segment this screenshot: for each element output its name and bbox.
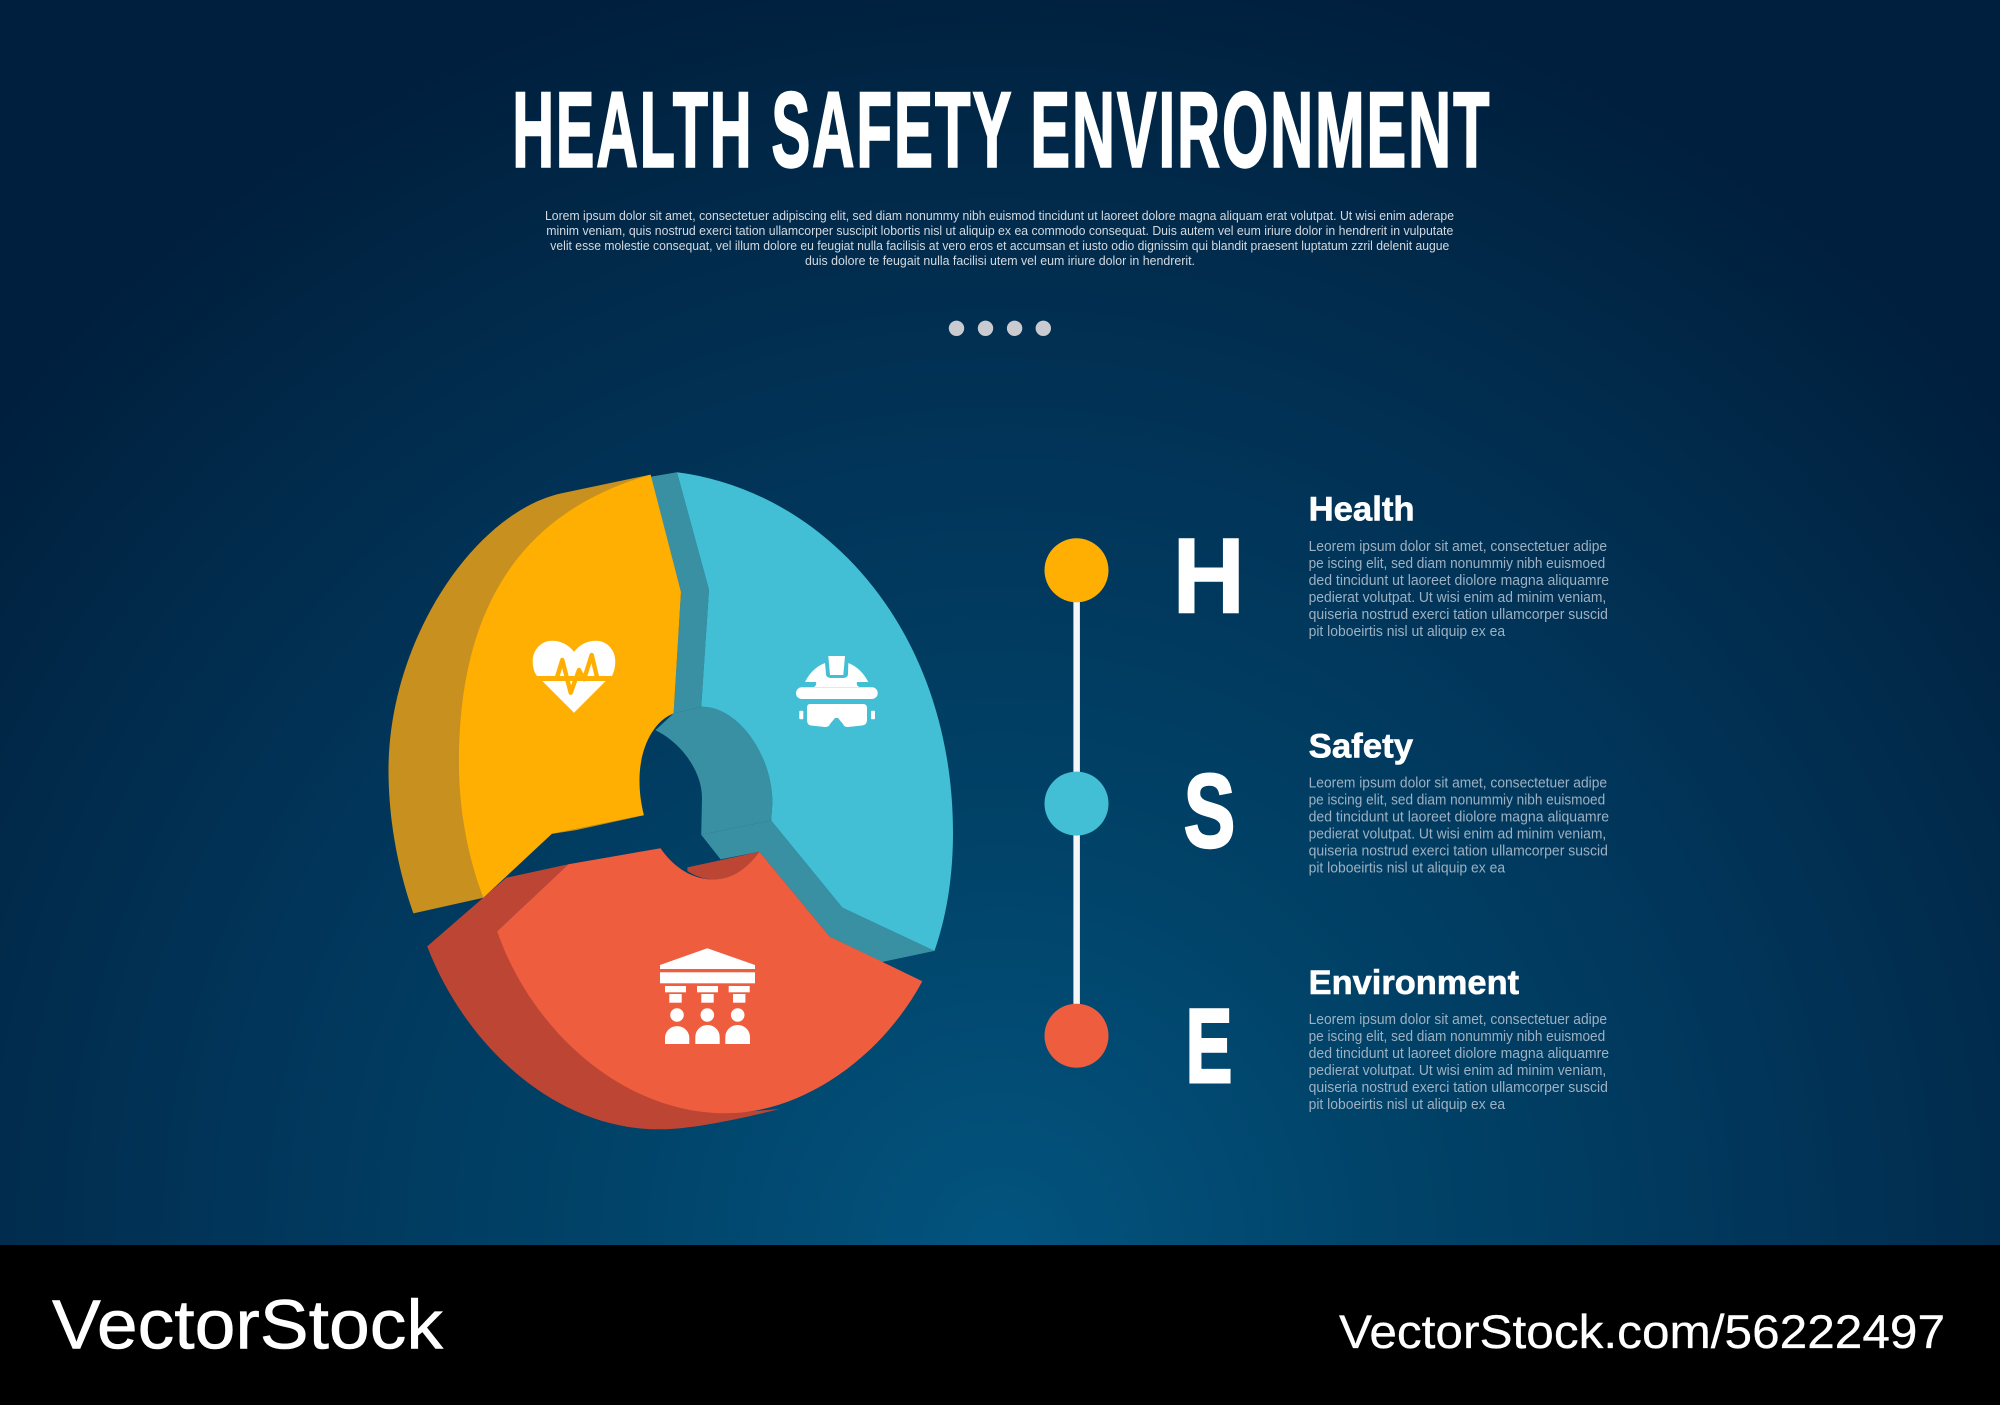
heading: health: Health bbox=[1309, 491, 1415, 529]
timeline marker: environment bbox=[1044, 1004, 1108, 1068]
segment: environment (red face) bbox=[497, 848, 922, 1113]
body: environment: pit loboeirtis nisl ut aliquip ex ea bbox=[1309, 1097, 1506, 1113]
body: environment: pe iscing elit, sed diam nonummiy nibh euismoed bbox=[1309, 1029, 1605, 1045]
body: health bbox=[1309, 539, 1609, 640]
segment: health (gold face) bbox=[459, 475, 681, 898]
body: health: pit loboeirtis nisl ut aliquip ex ea bbox=[1309, 624, 1506, 640]
heading: environment: Environment bbox=[1309, 964, 1519, 1002]
gold side wall bbox=[388, 475, 651, 913]
segment: safety (teal face) bbox=[677, 472, 953, 951]
body: health: pe iscing elit, sed diam nonummiy nibh euismoed bbox=[1309, 556, 1605, 572]
timeline marker: safety bbox=[1044, 772, 1108, 836]
body: safety: pe iscing elit, sed diam nonummiy nibh euismoed bbox=[1309, 793, 1605, 809]
timeline marker: health bbox=[1044, 538, 1108, 602]
intro text block: velit esse molestie consequat, vel illum dolore eu feugiat nulla facilisis at vero eros et accumsan et iusto odio dignissim qui blandit praesent luptatum zzril delenit augue bbox=[550, 238, 1449, 253]
pagination dots bbox=[949, 321, 1051, 336]
body: environment: Leorem ipsum dolor sit amet, consectetuer adipe bbox=[1309, 1012, 1607, 1028]
teal side walls bbox=[651, 472, 934, 962]
body: safety bbox=[1309, 776, 1609, 877]
icon: heart with pulse bbox=[533, 641, 615, 713]
footer logo: VectorStock bbox=[52, 1286, 444, 1364]
body: environment: ded tincidunt ut laoreet diolore magna aliquamre bbox=[1309, 1046, 1609, 1062]
title: HEALTH bbox=[512, 69, 754, 189]
body: health: quiseria nostrud exerci tation ullamcorper suscid bbox=[1309, 607, 1608, 623]
text block: health bbox=[1309, 491, 1609, 640]
body: environment: pedierat volutpat. Ut wisi enim ad minim veniam, bbox=[1309, 1063, 1606, 1079]
footer bar bbox=[0, 1245, 2000, 1405]
letter S: S bbox=[1184, 753, 1235, 870]
red side walls bbox=[427, 852, 780, 1129]
intro text block: minim veniam, quis nostrud exerci tation ullamcorper suscipit lobortis nisl ut aliquip ex ea commodo consequat. Duis autem vel eum iriure dolor in hendrerit in vulputate bbox=[546, 223, 1453, 238]
body: health: ded tincidunt ut laoreet diolore magna aliquamre bbox=[1309, 573, 1609, 589]
body: health: pedierat volutpat. Ut wisi enim ad minim veniam, bbox=[1309, 590, 1606, 606]
heading: safety: Safety bbox=[1309, 727, 1413, 765]
timeline connector bbox=[1073, 570, 1080, 1036]
body: safety: quiseria nostrud exerci tation ullamcorper suscid bbox=[1309, 844, 1608, 860]
letter H: H bbox=[1173, 516, 1245, 636]
body: safety: pit loboeirtis nisl ut aliquip ex ea bbox=[1309, 861, 1506, 877]
body: safety: Leorem ipsum dolor sit amet, consectetuer adipe bbox=[1309, 776, 1607, 792]
letter E: E bbox=[1186, 988, 1232, 1105]
title: ENVIRONMENT bbox=[1030, 69, 1492, 189]
body: environment bbox=[1309, 1012, 1609, 1113]
body: safety: pedierat volutpat. Ut wisi enim ad minim veniam, bbox=[1309, 827, 1606, 843]
intro text block: duis dolore te feugait nulla facilisi utem vel eum iriure dolor in hendrerit. bbox=[805, 253, 1195, 268]
text block: safety bbox=[1309, 727, 1609, 877]
body: safety: ded tincidunt ut laoreet diolore magna aliquamre bbox=[1309, 810, 1609, 826]
icon: building with people bbox=[660, 948, 755, 1044]
intro text block: Lorem ipsum dolor sit amet, consectetuer adipiscing elit, sed diam nonummy nibh euismod tincidunt ut laoreet dolore magna aliquam erat volutpat. Ut wisi enim aderape bbox=[545, 208, 1454, 223]
3D donut chart bbox=[388, 472, 953, 1129]
gold lower sliver bbox=[552, 815, 644, 834]
title bbox=[512, 69, 1492, 189]
body: environment: quiseria nostrud exerci tation ullamcorper suscid bbox=[1309, 1080, 1608, 1096]
text block: environment bbox=[1309, 964, 1609, 1113]
icon: hard hat and goggles bbox=[796, 656, 878, 727]
title: SAFETY bbox=[772, 69, 1014, 189]
footer url: VectorStock.com/56222497 bbox=[1339, 1305, 1945, 1358]
intro text block bbox=[545, 208, 1454, 268]
body: health: Leorem ipsum dolor sit amet, consectetuer adipe bbox=[1309, 539, 1607, 555]
